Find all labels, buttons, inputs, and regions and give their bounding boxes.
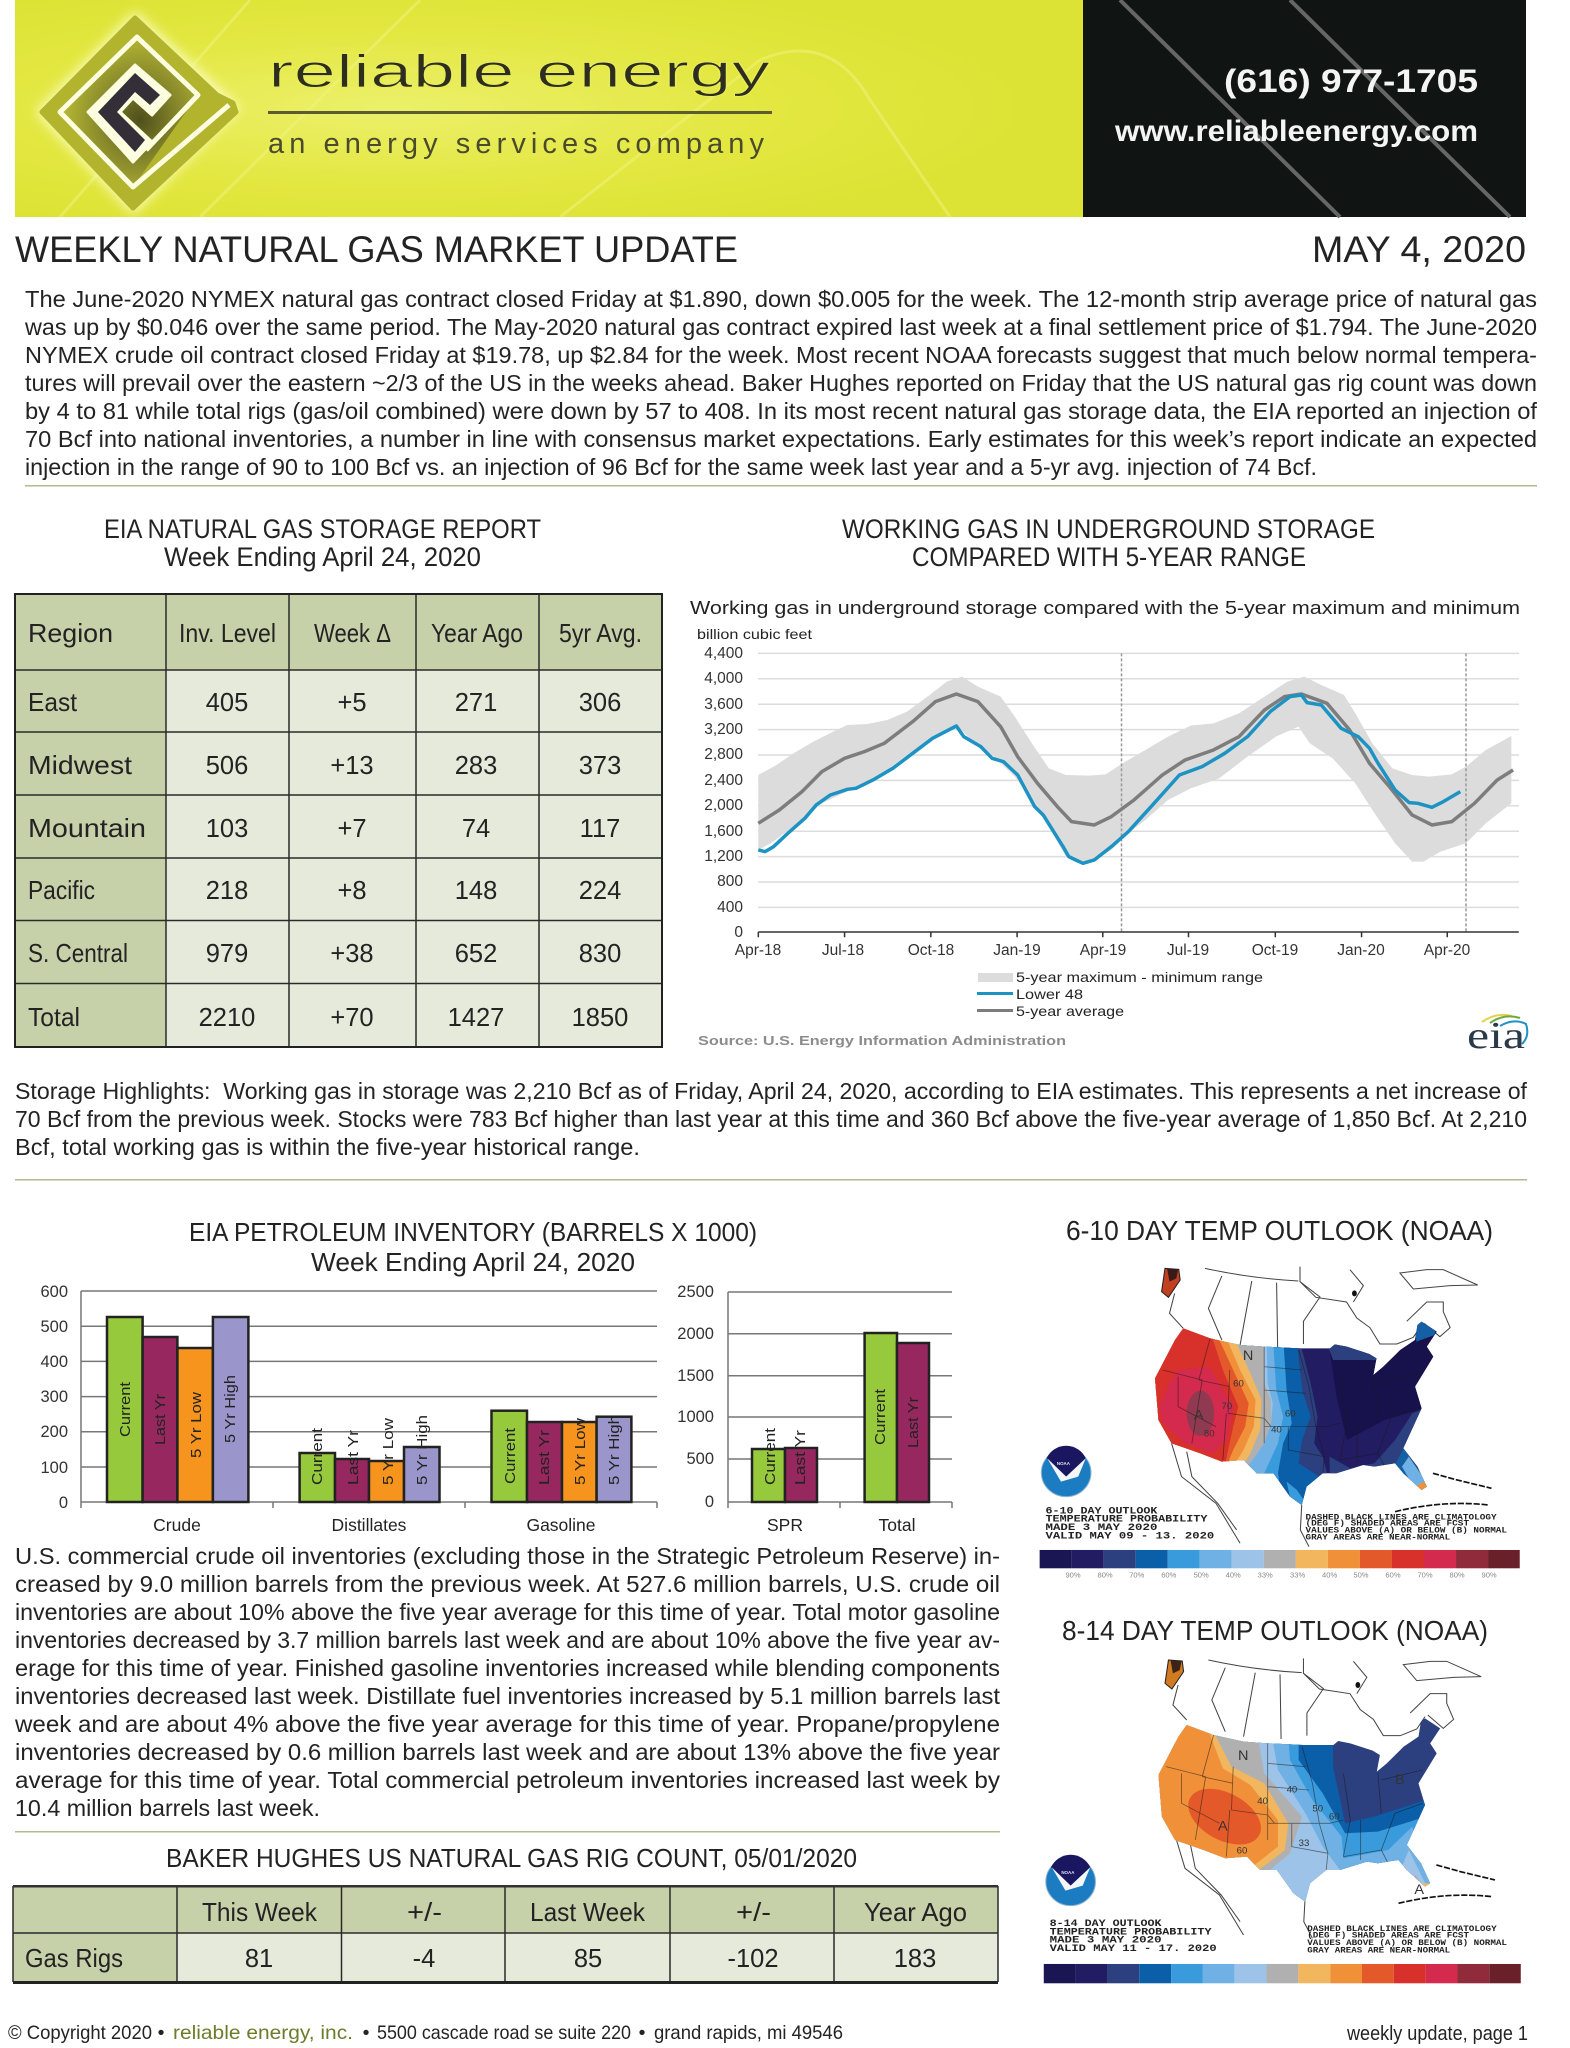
heading: 6-10 day outlook: 6-10 DAY TEMP OUTLOOK (NOAA) [1066, 1215, 1493, 1246]
rig table row: 183 [894, 1945, 936, 1973]
petroleum commentary paragraph: 10.4 million barrels last week. [15, 1795, 320, 1821]
map letters: N [1238, 1748, 1248, 1764]
y axis labels [704, 645, 743, 941]
heading: petroleum inventory [189, 1217, 757, 1277]
footer address line: reliable energy, inc. [173, 2022, 353, 2044]
petroleum commentary paragraph: erage for this time of year. Finished gasoline inventories increased while blending components [15, 1655, 1000, 1681]
icon: reliable energy spiral logo [36, 12, 240, 214]
table values: 1850 [572, 1004, 628, 1032]
map letters [1194, 1348, 1253, 1423]
crude bars [107, 1317, 248, 1502]
distillates bars: Last Yr [345, 1430, 362, 1485]
table header row: Week Δ [314, 618, 391, 648]
table values: +8 [337, 877, 367, 905]
table values: 979 [206, 940, 248, 968]
x axis labels: Jul-19 [1167, 942, 1209, 959]
y axis labels: 4,000 [704, 670, 743, 687]
table row labels: Pacific [28, 875, 95, 905]
table values: +38 [330, 940, 374, 968]
map caption: TEMPERATURE PROBABILITY [1050, 1927, 1213, 1938]
rig count table [13, 1885, 998, 1984]
contour values: 70 [1221, 1401, 1232, 1412]
map note: (DEG F) SHADED AREAS ARE FCST [1306, 1519, 1469, 1529]
y axis labels: 500 [40, 1318, 68, 1336]
heading: rig count: BAKER HUGHES US NATURAL GAS RIG COUNT, 05/01/2020 [166, 1843, 857, 1873]
probability legend [1044, 1964, 1521, 1983]
map caption: 6-10 DAY OUTLOOK [1045, 1506, 1158, 1517]
y axis labels: 3,200 [704, 721, 743, 738]
crude bars: Last Yr [152, 1394, 169, 1445]
unit label: billion cubic feet [697, 626, 812, 642]
y axis labels: 600 [40, 1283, 68, 1301]
footer address line: 5500 cascade road se suite 220 [377, 2022, 631, 2044]
website: www.reliableenergy.com [1114, 115, 1478, 148]
contour values: 40 [1271, 1425, 1282, 1436]
map caption [1045, 1506, 1214, 1542]
map caption: VALID MAY 11 - 17. 2020 [1050, 1944, 1217, 1955]
y axis labels [677, 1283, 714, 1511]
table header row: Region [28, 618, 113, 648]
rig table row: -102 [727, 1945, 779, 1973]
probability legend: 40% [1226, 1571, 1241, 1580]
temperature probability bands [1155, 1322, 1437, 1505]
plotted series [758, 653, 1519, 937]
rig table row [25, 1943, 936, 1973]
x axis labels [735, 942, 1471, 959]
probability legend: 80% [1098, 1571, 1113, 1580]
heading: storage report: Week Ending April 24, 2020 [164, 542, 481, 572]
x axis labels: Jan-19 [993, 942, 1041, 959]
Canada and Mexico outlines [1165, 1658, 1495, 1938]
table header row: Inv. Level [179, 618, 276, 648]
category labels [767, 1515, 915, 1535]
company name: reliable energy [268, 45, 770, 97]
market summary paragraph: by 4 to 81 while total rigs (gas/oil combined) were down by 57 to 408. In its most recent natural gas storage data, the EIA reported an injection of [25, 398, 1538, 424]
y axis labels: 3,600 [704, 696, 743, 713]
icon: NOAA logo [1041, 1446, 1091, 1497]
map note: GRAY AREAS ARE NEAR-NORMAL [1307, 1946, 1450, 1955]
footer address line: • [639, 2022, 646, 2044]
x axis labels: Oct-18 [908, 942, 954, 959]
heading: working gas chart: COMPARED WITH 5-YEAR RANGE [912, 542, 1306, 572]
table row labels: S. Central [28, 938, 128, 968]
table values: 506 [206, 752, 248, 780]
y axis labels: 1,200 [704, 848, 743, 865]
contour values: 60 [1237, 1845, 1247, 1856]
footer address line [8, 2022, 843, 2044]
y axis labels: 2500 [677, 1283, 714, 1301]
table values: 283 [455, 752, 497, 780]
total bars [865, 1333, 929, 1502]
chart legend: 5-year average [1016, 1003, 1124, 1019]
map note [1307, 1925, 1507, 1955]
petroleum commentary paragraph: creased by 9.0 million barrels from the previous week. At 527.6 million barrels, U.S. crude oil [15, 1571, 1000, 1597]
table values: 652 [455, 940, 497, 968]
table values [199, 689, 628, 1032]
rig table header: Year Ago [864, 1897, 967, 1927]
probability legend: 60% [1385, 1571, 1401, 1580]
heading: petroleum inventory: Week Ending April 24, 2020 [311, 1247, 635, 1277]
table values: 224 [579, 877, 621, 905]
table row labels: East [28, 687, 78, 717]
footer address line: © Copyright 2020 [8, 2022, 152, 2044]
storage highlights paragraph: Storage Highlights: Working gas in storage was 2,210 Bcf as of Friday, April 24, 2020, according to EIA estimates. This represents a net increase of [15, 1078, 1528, 1104]
x axis labels: Jul-18 [822, 942, 864, 959]
table values: 2210 [199, 1004, 255, 1032]
date: MAY 4, 2020 [1312, 229, 1526, 270]
bar chart: SPR and total [677, 1283, 952, 1535]
y axis labels: 2,400 [704, 772, 743, 789]
table header row: Year Ago [431, 618, 523, 648]
y axis labels: 0 [59, 1494, 68, 1512]
table values: +70 [330, 1004, 374, 1032]
market summary paragraph [24, 286, 1538, 480]
contour values: 40 [1257, 1796, 1268, 1807]
probability legend: 40% [1322, 1571, 1338, 1580]
gasoline bars: 5 Yr High [606, 1415, 623, 1485]
table values: 306 [579, 689, 621, 717]
map note: GRAY AREAS ARE NEAR-NORMAL [1306, 1533, 1450, 1542]
rig table header: Last Week [530, 1897, 646, 1927]
map: 6-10 day temperature outlook [1040, 1267, 1520, 1580]
rig table header: +/- [736, 1897, 771, 1927]
category labels: Gasoline [526, 1515, 596, 1535]
map caption: MADE 3 MAY 2020 [1050, 1936, 1162, 1947]
map caption: 8-14 DAY OUTLOOK [1050, 1919, 1163, 1930]
storage highlights paragraph: 70 Bcf from the previous week. Stocks were 783 Bcf higher than last year at this time and 360 Bcf above the five-year average of 1,850 Bcf. At 2,210 [15, 1106, 1527, 1132]
x axis labels: Jan-20 [1337, 942, 1385, 959]
table values: 148 [455, 877, 497, 905]
y axis labels: 1000 [677, 1408, 714, 1426]
5-year range band [758, 677, 1511, 863]
y axis labels: 100 [40, 1459, 68, 1477]
market summary paragraph: tures will prevail over the eastern ~2/3 of the US in the weeks ahead. Baker Hughes reported on Friday that the US natural gas rig count was down [25, 370, 1537, 396]
x axis labels: Apr-19 [1080, 942, 1126, 959]
probability legend: 90% [1482, 1571, 1497, 1580]
table header row [28, 618, 642, 648]
table row labels: Midwest [28, 750, 133, 780]
map note: DASHED BLACK LINES ARE CLIMATOLOGY [1307, 1925, 1497, 1934]
SPR bars: Current [762, 1427, 779, 1485]
heading: storage report [104, 514, 541, 572]
map note: DASHED BLACK LINES ARE CLIMATOLOGY [1306, 1513, 1497, 1522]
table values: +5 [337, 689, 367, 717]
map caption: VALID MAY 09 - 13. 2020 [1045, 1531, 1214, 1542]
table row labels: Mountain [28, 813, 146, 843]
gasoline bars: Current [502, 1427, 519, 1484]
map note: VALUES ABOVE (A) OR BELOW (B) NORMAL [1307, 1938, 1507, 1948]
distillates bars: Current [309, 1427, 326, 1485]
table values: +7 [337, 815, 367, 843]
table values: 373 [579, 752, 621, 780]
icon: NOAA logo [1046, 1855, 1095, 1906]
storage highlights paragraph: Bcf, total working gas is within the five-year historical range. [15, 1134, 640, 1160]
Lower 48 line [758, 695, 1460, 863]
y axis labels: 0 [705, 1493, 714, 1511]
yellow logo panel [15, 0, 1083, 217]
y axis labels: 0 [734, 924, 743, 941]
y axis labels: 2000 [677, 1325, 714, 1343]
contour values: 50 [1312, 1804, 1323, 1815]
y axis labels: 2,000 [704, 797, 743, 814]
temperature probability bands [1158, 1718, 1440, 1902]
map: 8-14 day temperature outlook [1044, 1658, 1521, 1983]
market summary paragraph: The June-2020 NYMEX natural gas contract closed Friday at $1.890, down $0.005 for the week. The 12-month strip average price of natural gas [25, 286, 1537, 312]
probability legend: 90% [1065, 1571, 1081, 1580]
table values: 103 [206, 815, 248, 843]
gasoline bars: Last Yr [536, 1430, 553, 1485]
line chart: working gas in storage [690, 597, 1527, 1057]
table values: 1427 [448, 1004, 504, 1032]
map note: VALUES ABOVE (A) OR BELOW (B) NORMAL [1306, 1525, 1507, 1535]
petroleum commentary paragraph: inventories are about 10% above the five year average for this time of year. Total motor gasoline [15, 1599, 1000, 1625]
icon: eia logo: eia [1467, 1015, 1525, 1057]
probability legend: 60% [1161, 1571, 1177, 1580]
storage highlights paragraph [15, 1078, 1528, 1160]
heading: working gas chart [842, 514, 1375, 572]
table row labels [28, 687, 146, 1032]
petroleum commentary paragraph: inventories decreased by 3.7 million barrels last week and are about 10% above the five year av- [15, 1627, 1000, 1653]
category labels: Distillates [332, 1515, 407, 1535]
x axis labels: Apr-20 [1424, 942, 1471, 959]
map letters [1218, 1748, 1425, 1898]
heading: storage report: EIA NATURAL GAS STORAGE REPORT [104, 514, 541, 544]
distillates bars: 5 Yr High [414, 1415, 431, 1485]
rig table row: 85 [574, 1945, 602, 1973]
market summary paragraph: injection in the range of 90 to 100 Bcf vs. an injection of 96 Bcf for the same week last year and a 5-yr avg. injection of 74 Bcf. [25, 454, 1317, 480]
icon: NOAA logo: NOAA [1061, 1870, 1075, 1875]
total bars: Current [872, 1388, 889, 1445]
map note: (DEG F) SHADED AREAS ARE FCST [1307, 1931, 1469, 1941]
contour values: 60 [1285, 1409, 1296, 1420]
contour values: 60 [1233, 1379, 1244, 1390]
petroleum commentary paragraph: average for this time of year. Total commercial petroleum inventories increased last week by [15, 1767, 1001, 1793]
table values: +13 [330, 752, 374, 780]
petroleum commentary paragraph [14, 1543, 1001, 1821]
y axis labels: 2,800 [704, 746, 743, 763]
Canada and Mexico outlines [1162, 1267, 1491, 1547]
market summary paragraph: was up by $0.046 over the same period. The May-2020 natural gas contract expired last week at a final settlement price of $1.794. The June-2020 [24, 314, 1537, 340]
heading: working gas chart: WORKING GAS IN UNDERGROUND STORAGE [842, 514, 1375, 544]
y axis labels [40, 1283, 68, 1512]
chart legend [977, 969, 1263, 1019]
SPR bars: Last Yr [792, 1430, 809, 1485]
chart legend: 5-year maximum - minimum range [1016, 969, 1263, 985]
gasoline bars [492, 1411, 631, 1502]
rig table row: Gas Rigs [25, 1943, 123, 1973]
map caption: MADE 3 MAY 2020 [1045, 1523, 1157, 1534]
map letters: A [1218, 1819, 1228, 1835]
total bars: Last Yr [905, 1397, 922, 1448]
phone number: (616) 977-1705 [1224, 63, 1478, 99]
tagline rule and tagline [268, 111, 772, 160]
gasoline bars: 5 Yr Low [572, 1418, 589, 1485]
y axis labels: 400 [717, 899, 743, 916]
crude bars: Current [117, 1381, 134, 1437]
y axis labels: 4,400 [704, 645, 743, 662]
page title: WEEKLY NATURAL GAS MARKET UPDATE [15, 229, 738, 270]
contour values: 60 [1329, 1811, 1340, 1822]
SPR bars [752, 1427, 817, 1502]
contour values: 80 [1204, 1429, 1215, 1440]
distillates bars [300, 1415, 440, 1502]
storage table [15, 594, 662, 1047]
category labels [153, 1515, 596, 1535]
y axis labels: 800 [717, 873, 743, 890]
chart legend: Lower 48 [1016, 986, 1083, 1002]
source note: Source: U.S. Energy Information Administration [698, 1033, 1066, 1048]
heading: 8-14 day outlook: 8-14 DAY TEMP OUTLOOK (NOAA) [1062, 1615, 1488, 1646]
probability legend: 33% [1290, 1571, 1306, 1580]
rig table row: 81 [245, 1945, 273, 1973]
contour values: 33 [1299, 1838, 1309, 1849]
table values: 218 [206, 877, 248, 905]
map note [1306, 1513, 1507, 1542]
table header row: 5yr Avg. [559, 618, 642, 648]
petroleum commentary paragraph: U.S. commercial crude oil inventories (excluding those in the Strategic Petroleum Reserve) in- [15, 1543, 1000, 1569]
map letters: N [1243, 1348, 1253, 1364]
contour values: 40 [1287, 1785, 1297, 1796]
rig table header: +/- [407, 1897, 442, 1927]
y axis labels: 400 [40, 1353, 68, 1371]
distillates bars: 5 Yr Low [380, 1418, 397, 1485]
footer address line: • [158, 2022, 165, 2044]
y axis labels: 200 [40, 1423, 68, 1441]
bar chart: crude, distillates, gasoline [40, 1283, 657, 1535]
table values: 271 [455, 689, 497, 717]
table values: 405 [206, 689, 248, 717]
category labels: Crude [153, 1515, 201, 1535]
petroleum commentary paragraph: inventories decreased by 0.6 million barrels last week and are about 13% above the five year [15, 1739, 1000, 1765]
rig table row: -4 [413, 1945, 435, 1973]
table values: 830 [579, 940, 621, 968]
category labels: Total [879, 1515, 915, 1535]
category labels: SPR [767, 1515, 803, 1535]
map letters: A [1194, 1408, 1204, 1423]
tagline rule and tagline: an energy services company [268, 128, 765, 160]
market summary paragraph: 70 Bcf into national inventories, a number in line with consensus market expectations. Early estimates for this week’s report indicate an expected [25, 426, 1537, 452]
y axis labels: 1,600 [704, 823, 743, 840]
footer address line: • [363, 2022, 370, 2044]
rig table header [202, 1897, 967, 1927]
icon: NOAA logo: NOAA [1057, 1461, 1071, 1466]
crude bars: 5 Yr Low [188, 1392, 205, 1458]
table values: 117 [580, 815, 620, 843]
table values: 74 [462, 815, 490, 843]
heading: petroleum inventory: EIA PETROLEUM INVENTORY (BARRELS X 1000) [189, 1217, 757, 1247]
probability legend: 80% [1449, 1571, 1465, 1580]
market summary paragraph: NYMEX crude oil contract closed Friday at $19.78, up $2.84 for the week. Most recent NOAA forecasts suggest that much below normal tempera- [25, 342, 1537, 368]
black contact panel [1083, 0, 1526, 217]
map caption: TEMPERATURE PROBABILITY [1045, 1515, 1208, 1526]
crude bars: 5 Yr High [222, 1375, 239, 1443]
probability legend: 70% [1129, 1571, 1145, 1580]
y axis labels: 1500 [677, 1367, 714, 1385]
header banner [15, 0, 1526, 217]
contour values [1237, 1785, 1340, 1856]
map caption [1050, 1919, 1217, 1955]
probability legend: 50% [1194, 1571, 1209, 1580]
x axis labels: Apr-18 [735, 942, 781, 959]
chart title: Working gas in underground storage compared with the 5-year maximum and minimum [690, 597, 1520, 618]
petroleum commentary paragraph: week and are about 4% above the five year average for this time of year. Propane/propylene [14, 1711, 1000, 1737]
table row labels: Total [28, 1002, 80, 1032]
5-year average line [758, 694, 1513, 825]
x axis labels: Oct-19 [1252, 942, 1298, 959]
map letters: B [1395, 1772, 1405, 1788]
probability legend: 33% [1258, 1571, 1273, 1580]
rig table header: This Week [202, 1897, 318, 1927]
map letters: A [1414, 1882, 1425, 1898]
page number: weekly update, page 1 [1346, 2023, 1528, 2045]
y axis labels: 500 [686, 1450, 714, 1468]
footer address line: grand rapids, mi 49546 [654, 2022, 843, 2044]
y axis labels: 300 [40, 1388, 68, 1406]
contour values [1204, 1379, 1296, 1440]
petroleum commentary paragraph: inventories decreased last week. Distillate fuel inventories increased by 5.1 million barrels last [15, 1683, 1001, 1709]
probability legend: 50% [1353, 1571, 1369, 1580]
probability legend [1040, 1550, 1520, 1580]
probability legend: 70% [1417, 1571, 1433, 1580]
